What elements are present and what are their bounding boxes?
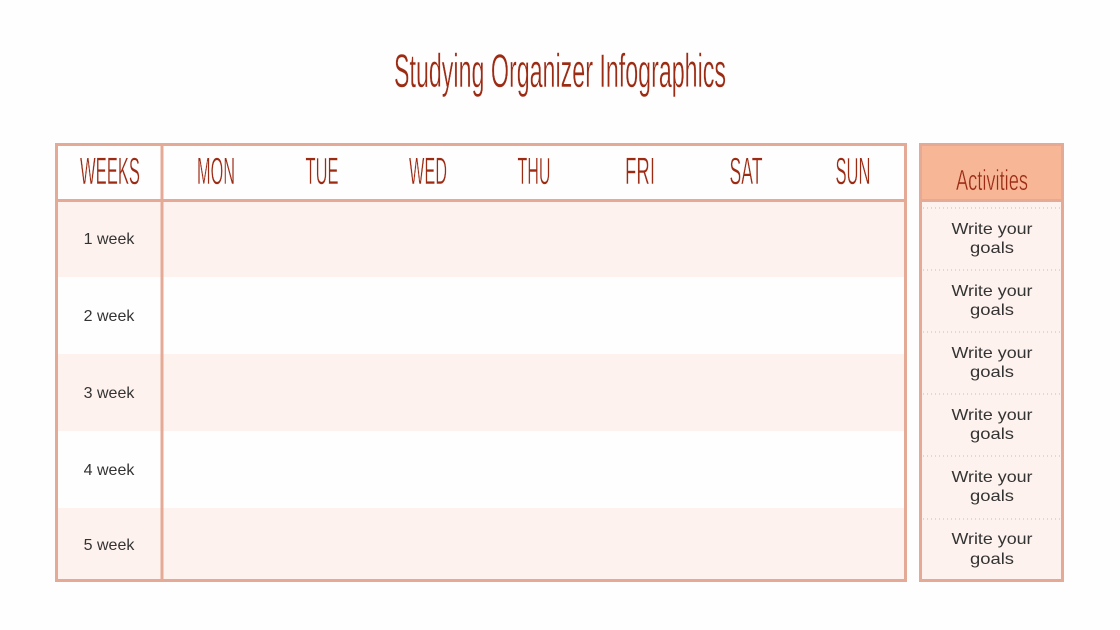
header: days: THU bbox=[518, 151, 550, 193]
activities header bbox=[920, 144, 1062, 200]
table frame bbox=[56, 144, 906, 580]
activity items bbox=[952, 221, 1033, 568]
activity items: Write your bbox=[952, 407, 1033, 424]
activity items: Write your bbox=[952, 345, 1033, 362]
activity items: goals bbox=[970, 302, 1014, 319]
header: days: SAT bbox=[730, 151, 762, 193]
activity items: goals bbox=[970, 364, 1014, 381]
activities heading: Activities bbox=[956, 165, 1028, 197]
activity items: goals bbox=[970, 551, 1014, 568]
week labels: 1 week bbox=[84, 231, 135, 248]
week labels bbox=[84, 231, 135, 554]
activity items: Write your bbox=[952, 283, 1033, 300]
header: days: WED bbox=[409, 151, 447, 193]
activity items: goals bbox=[970, 488, 1014, 505]
header: days: TUE bbox=[306, 151, 338, 193]
activity items: Write your bbox=[952, 469, 1033, 486]
activity items: goals bbox=[970, 426, 1014, 443]
panel: weekly schedule table: SUN bbox=[836, 151, 870, 193]
activity items: Write your bbox=[952, 531, 1033, 548]
activity items: goals bbox=[970, 240, 1014, 257]
panel: weekly schedule table: WEEKS bbox=[80, 151, 140, 193]
header: days: FRI bbox=[625, 151, 655, 193]
header: days: MON bbox=[197, 151, 235, 193]
dotted dividers bbox=[923, 208, 1061, 519]
week labels: 5 week bbox=[84, 537, 135, 554]
panel: weekly schedule table bbox=[56, 144, 906, 580]
week labels: 2 week bbox=[84, 308, 135, 325]
panel: activities bbox=[920, 144, 1062, 580]
week labels: 4 week bbox=[84, 462, 135, 479]
text: Studying Organizer Infographics bbox=[394, 44, 726, 97]
activity items: Write your bbox=[952, 221, 1033, 238]
row bands bbox=[57, 201, 906, 580]
week labels: 3 week bbox=[84, 385, 135, 402]
header: days bbox=[197, 151, 870, 193]
